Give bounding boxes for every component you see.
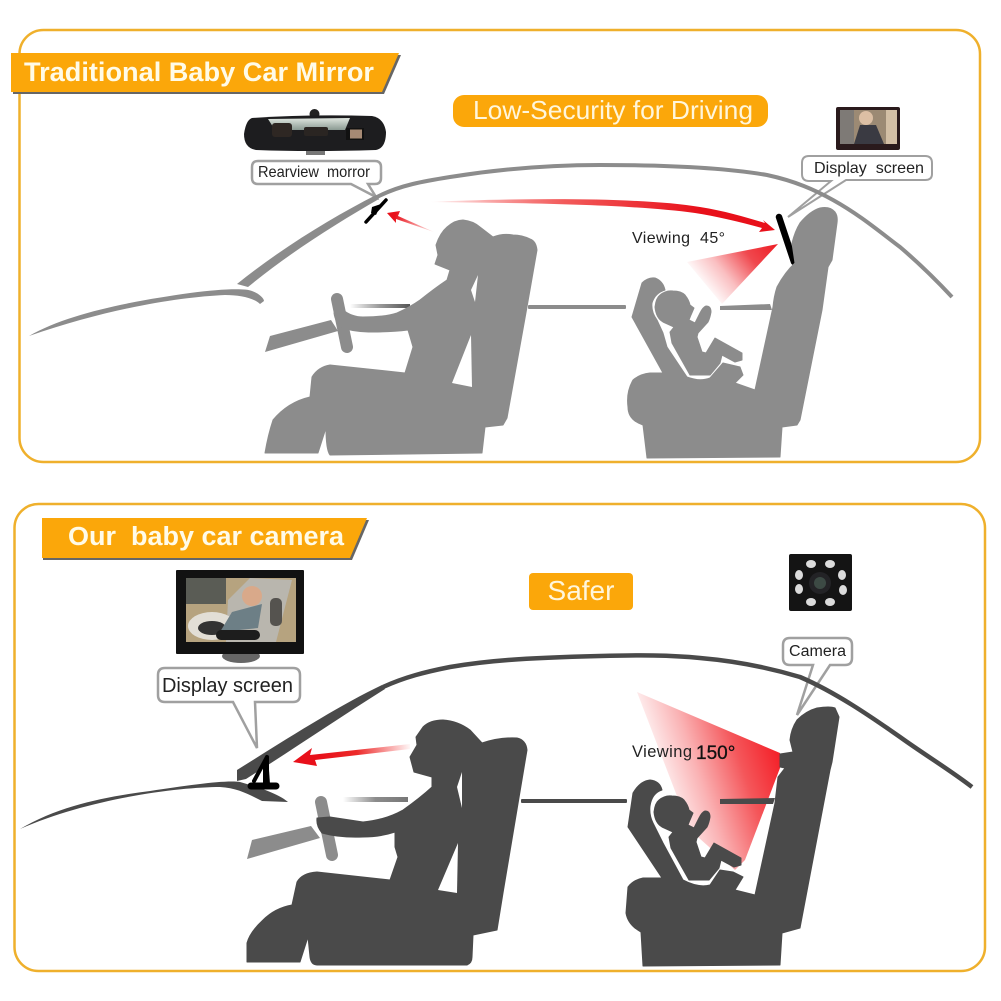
callout: Camera: [783, 638, 852, 715]
callout: Rearview morror: [252, 161, 381, 197]
seat divider lines: top: [350, 304, 772, 310]
steering wheel: lower: [247, 802, 332, 859]
callout: Display screen: [158, 668, 300, 748]
silhouette: driver in seat, top: [265, 220, 537, 455]
label: Viewing 150: 150°: [696, 743, 735, 764]
display marker: [779, 217, 794, 262]
badge: Low-Security for Driving: Low-Security for Driving: [473, 95, 753, 125]
silhouette: baby, lower: [654, 796, 741, 880]
view cone: 150 degrees: [637, 692, 780, 870]
car outline: top hood: [29, 289, 264, 336]
silhouette: baby, top: [655, 291, 742, 375]
label: Viewing 150: [632, 743, 735, 764]
silhouette: driver in seat, lower: [247, 720, 527, 965]
seat divider lines: lower: [343, 797, 775, 804]
arrow: driver glance to display: [293, 744, 410, 766]
heading banner: Traditional Baby Car Mirror: [11, 53, 401, 94]
photo: camera with leds: [789, 554, 852, 611]
label: Viewing 150: Viewing: [632, 743, 692, 761]
panel: our baby car camera: [14, 504, 985, 971]
car outline: top roof and windshield: [237, 165, 952, 297]
callout: Display screen: Display screen: [814, 160, 924, 177]
callout: Rearview morror: Rearview morror: [258, 164, 371, 181]
arrow: driver glance to mirror: [387, 211, 434, 232]
badge: Safer: [529, 573, 633, 610]
heading banner: Our baby car camera: Our baby car camera: [68, 523, 345, 551]
display stand: [251, 756, 276, 786]
badge: Safer: Safer: [548, 575, 614, 606]
arrow: mirror to display screen: [427, 199, 775, 232]
rearview mirror marker: [366, 200, 386, 222]
label: Viewing 45: Viewing 45°: [632, 230, 725, 247]
car outline: lower windshield and roof: [237, 655, 972, 787]
photo: display screen with baby: [176, 570, 304, 663]
callout: Display screen: [788, 156, 932, 217]
panel: traditional baby car mirror: [11, 30, 980, 462]
silhouette: rear seat with baby seat, lower: [626, 707, 839, 966]
silhouette: rear seat with baby seat, top: [628, 208, 837, 458]
callout: Camera: Camera: [789, 643, 846, 660]
photo: rearview mirror: [244, 109, 386, 155]
heading banner: Our baby car camera: [42, 518, 369, 560]
callout: Display screen: Display screen: [162, 674, 293, 697]
heading banner: Traditional Baby Car Mirror: Traditional Baby Car Mirror: [24, 57, 374, 87]
view cone: 45 degrees: [687, 244, 778, 304]
photo: baby on display screen: [836, 107, 900, 150]
steering wheel: top: [265, 299, 347, 352]
car outline: lower hood: [20, 782, 288, 829]
